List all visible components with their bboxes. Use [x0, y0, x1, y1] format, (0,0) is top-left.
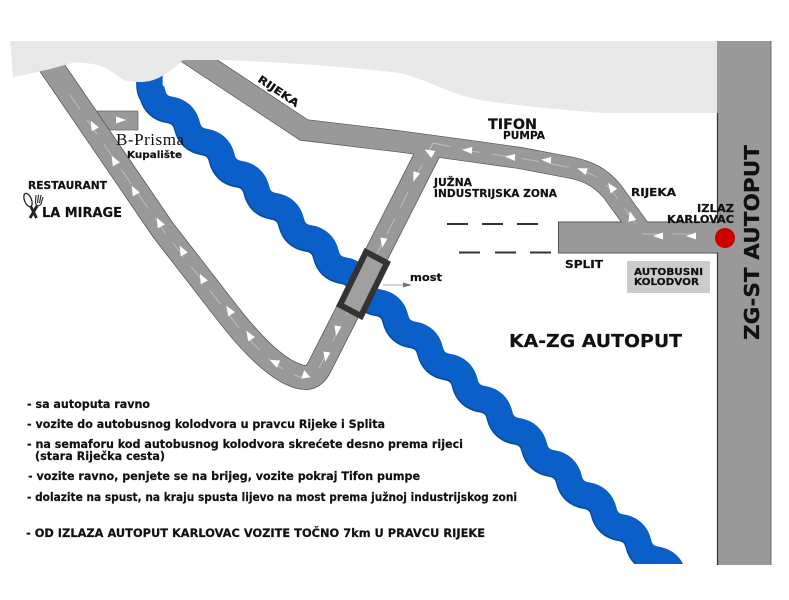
label: Split: SPLIT — [565, 259, 604, 271]
bus station box — [627, 261, 710, 293]
icon: fork and spoon — [22, 192, 43, 218]
directions text — [26, 397, 517, 540]
label: Izlaz Karlovac: KARLOVAC — [667, 214, 734, 226]
directions text: (stara Riječka cesta) — [35, 449, 165, 463]
bus station box: KOLODVOR — [634, 277, 699, 288]
label: Tifon pumpa: TIFON — [488, 117, 537, 133]
exit marker — [715, 228, 735, 248]
label: restaurant La Mirage: LA MIRAGE — [42, 206, 122, 221]
river — [149, 72, 691, 593]
label: B-Prisma Kupaliste: B-Prisma — [116, 130, 184, 149]
label: industrial zone: INDUSTRIJSKA ZONA — [434, 188, 558, 200]
label: restaurant La Mirage — [28, 180, 122, 221]
label: most with arrow: most — [410, 271, 442, 284]
label: restaurant La Mirage: RESTAURANT — [28, 180, 108, 192]
terrain at top — [10, 41, 717, 113]
label: Rijeka along road: RIJEKA — [255, 74, 302, 110]
directions text: - sa autoputa ravno — [27, 397, 150, 411]
road network — [40, 48, 720, 378]
directions text: - dolazite na spust, na kraju spusta lijevo na most prema južnoj industrijskog zoni — [27, 490, 517, 504]
label: B-Prisma Kupaliste — [116, 130, 184, 161]
horizontal road join cover — [700, 222, 719, 252]
dashed roads — [447, 224, 551, 252]
label: KA-ZG autoput: KA-ZG AUTOPUT — [509, 331, 683, 352]
label: industrial zone: JUŽNA — [433, 176, 473, 189]
directions text: - vozite do autobusnog kolodvora u pravcu Rijeke i Splita — [27, 417, 385, 431]
direction arrows — [87, 116, 696, 379]
label: Rijeka: RIJEKA — [631, 187, 677, 199]
directions text: - na semaforu kod autobusnog kolodvora skrećete desno prema rijeci — [27, 437, 463, 451]
autoput ZG-ST — [717, 41, 771, 565]
bridge — [340, 252, 387, 316]
label: B-Prisma Kupaliste: Kupalište — [127, 149, 182, 161]
label: most with arrow — [383, 271, 442, 288]
label: Izlaz Karlovac — [667, 203, 734, 226]
directions text: - vozite ravno, penjete se na brijeg, vozite pokraj Tifon pumpe — [28, 469, 420, 483]
label: Tifon pumpa — [488, 117, 546, 142]
label: Tifon pumpa: PUMPA — [503, 130, 546, 142]
directions text: - OD IZLAZA AUTOPUT KARLOVAC VOZITE TOČNO 7km U PRAVCU RIJEKE — [26, 525, 485, 540]
bus station box: AUTOBUSNI — [634, 267, 703, 278]
label: industrial zone — [433, 176, 558, 200]
autoput ZG-ST: ZG-ST AUTOPUT — [740, 145, 764, 340]
label: Izlaz Karlovac: IZLAZ — [697, 203, 734, 215]
